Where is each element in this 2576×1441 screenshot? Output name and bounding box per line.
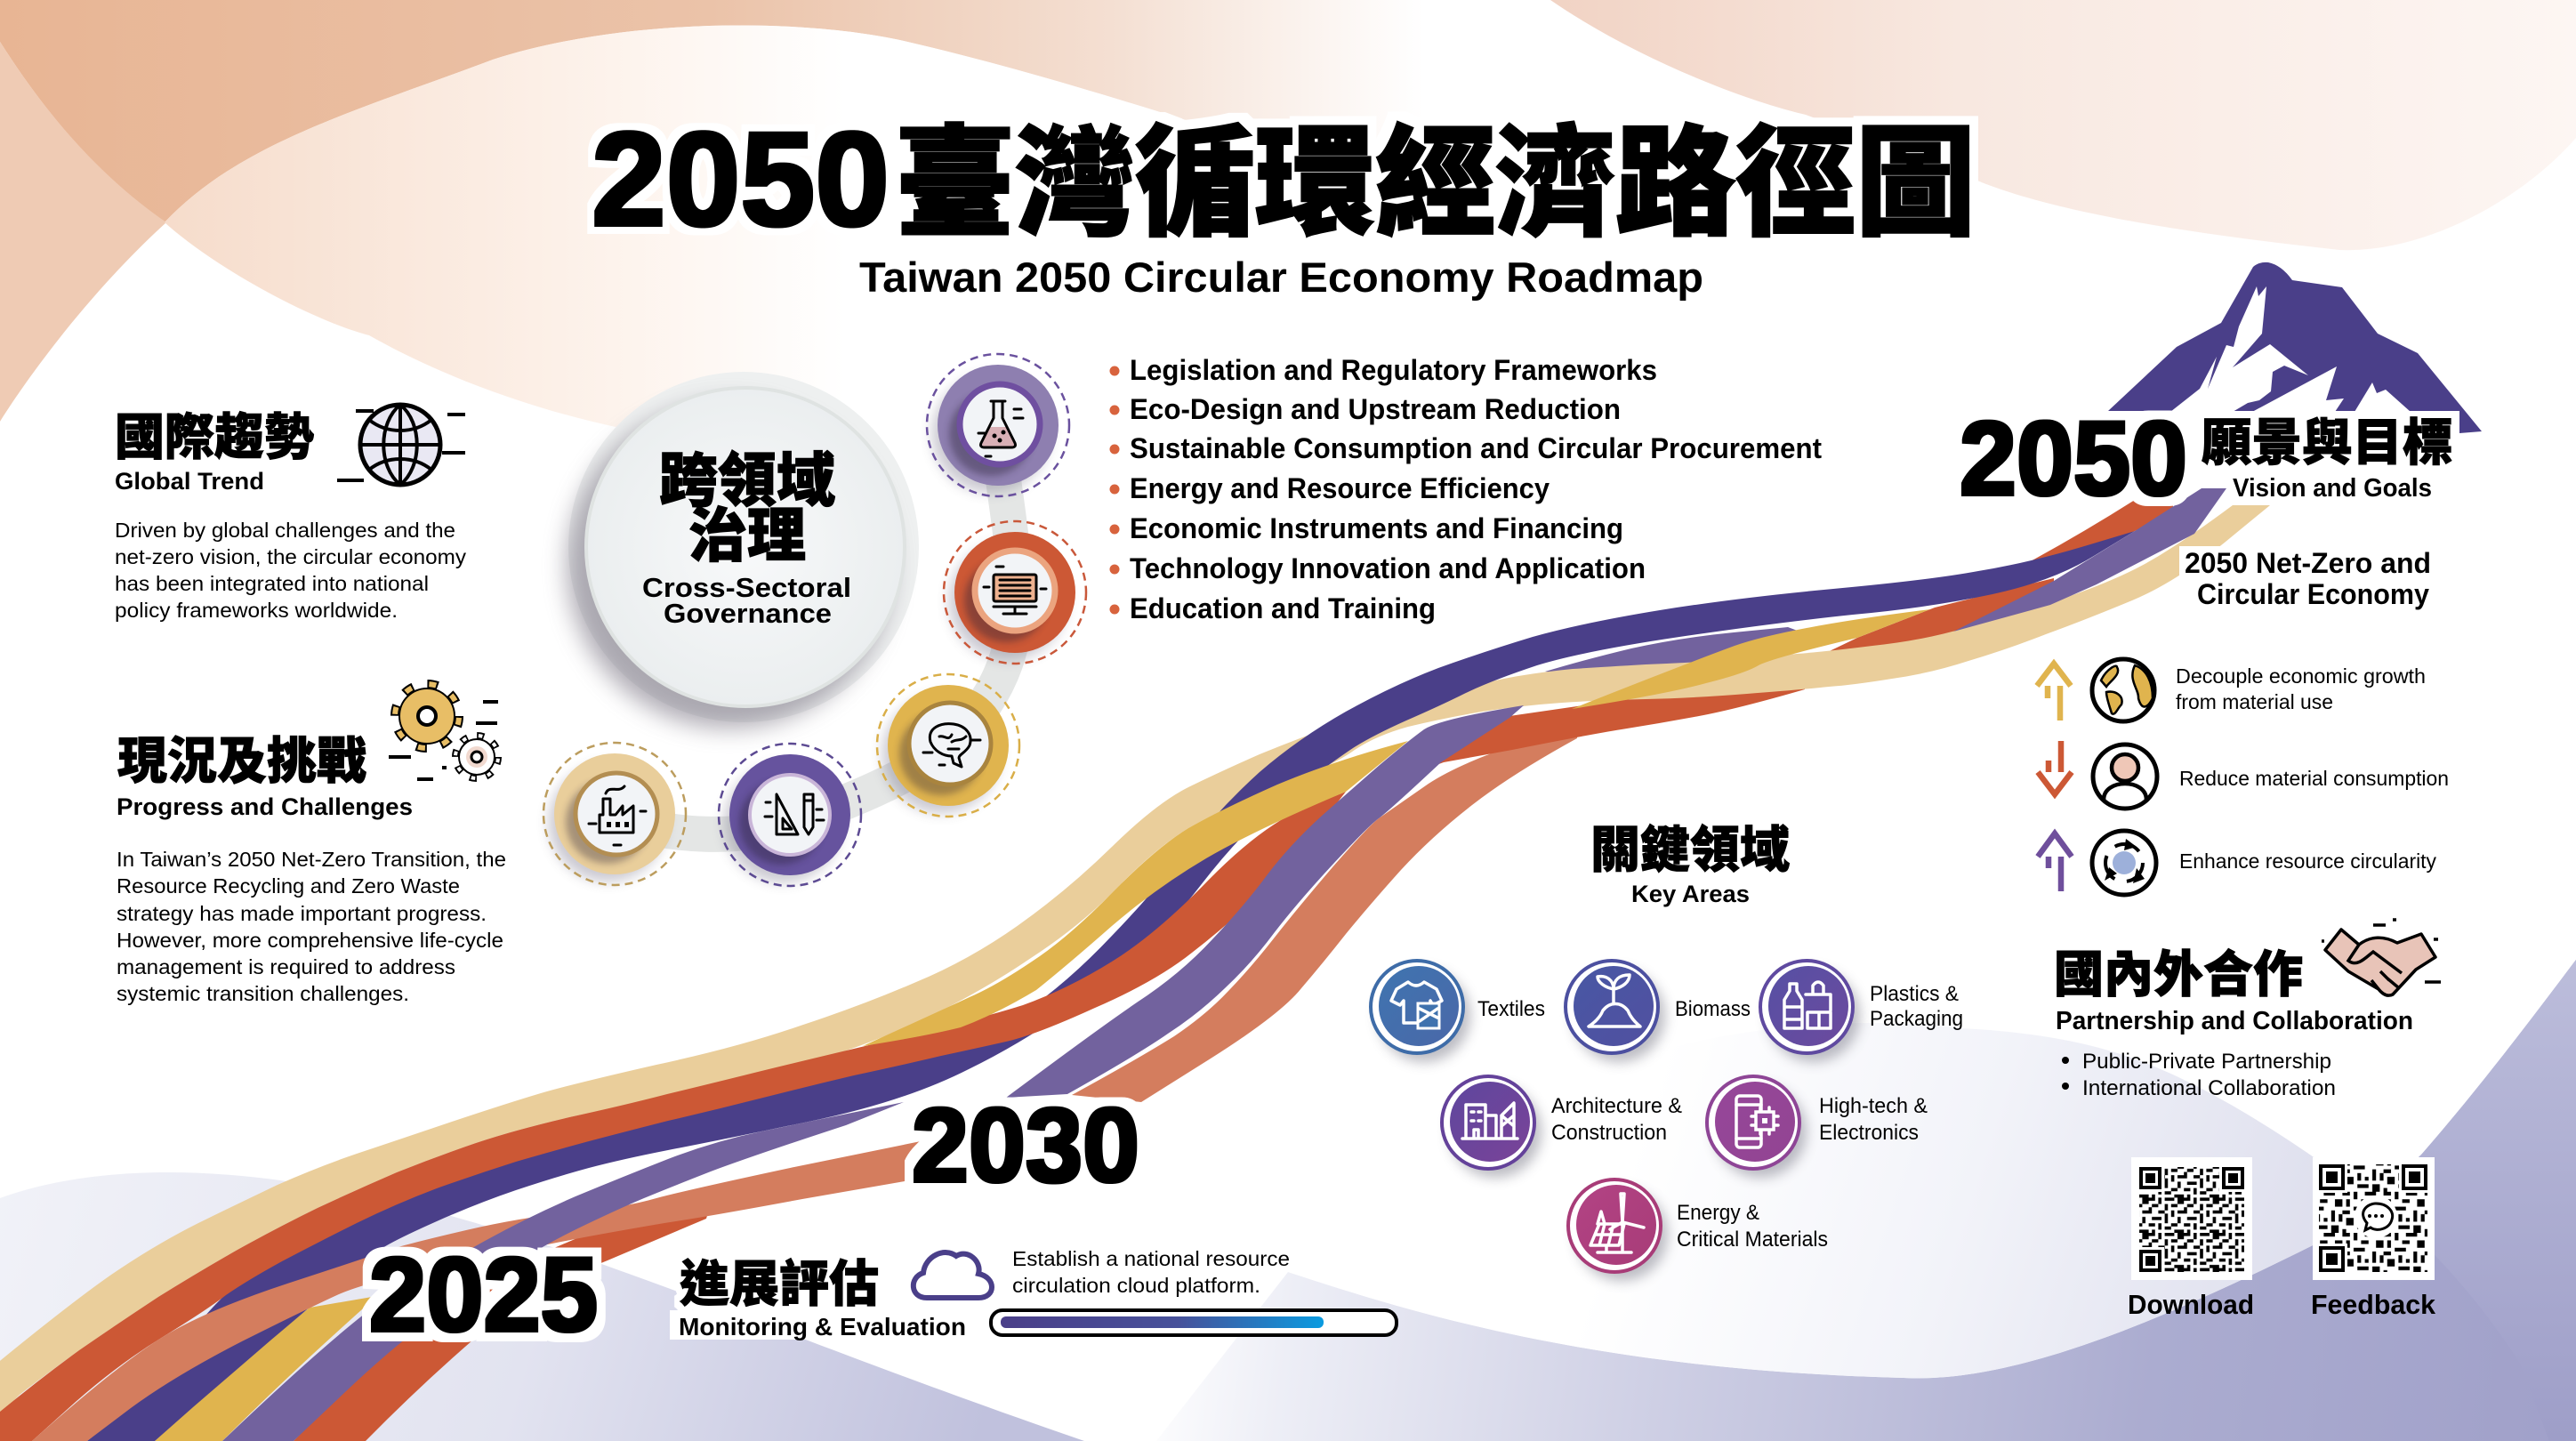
node: monitor: [944, 521, 1086, 664]
year label 2050: 2050: [1960, 400, 2187, 518]
title: year part: 2050: [592, 104, 890, 254]
text: progress description: systemic transition challenges.: [117, 982, 409, 1005]
text: progress description: [117, 848, 506, 1005]
title: [592, 104, 1976, 254]
text: global trend description: [115, 519, 467, 622]
text: cloud platform: Establish a national resource: [1012, 1247, 1290, 1270]
background: light lavender lens: [1288, 1023, 2373, 1378]
list: partnership items: Public-Private Partnership: [2082, 1050, 2331, 1074]
text: net-zero goal: Circular Economy: [2197, 578, 2429, 610]
background: top-right peach wave: [1550, 0, 2576, 250]
panel: partnership and collaboration: [2054, 920, 2441, 1100]
node: ruler and pencil: [719, 744, 861, 886]
list: partnership items: [2062, 1050, 2336, 1100]
icon: gears: [389, 684, 498, 779]
heading: global trend chinese: 國際趨勢: [115, 409, 314, 465]
panel: cross-sectoral governance: [543, 354, 1086, 886]
label: feedback: Feedback: [2311, 1289, 2436, 1320]
text: global trend description: policy frameworks worldwide.: [115, 599, 398, 622]
heading: vision english: Vision and Goals: [2233, 474, 2432, 503]
heading: global trend english: Global Trend: [115, 468, 264, 495]
year label 2030: 2030: [912, 1087, 1139, 1204]
node: factory: [543, 743, 686, 885]
background: right lavender wedge: [2373, 960, 2576, 1441]
connector path: [615, 425, 1015, 834]
main circle heading english: Cross-Sectoral: [642, 572, 851, 603]
heading: progress chinese: 現況及挑戰: [117, 733, 366, 789]
node: brain: [877, 674, 1019, 817]
list: governance strategies: Legislation and Regulatory Frameworks: [1130, 354, 1657, 386]
heading: partnership english: Partnership and Collaboration: [2056, 1007, 2413, 1035]
text: enhance: Enhance resource circularity: [2179, 849, 2436, 873]
callout: white backing for vision english: [2230, 471, 2443, 505]
area: plastics and packaging: Plastics &: [1870, 982, 1959, 1006]
text: decouple: Decouple economic growth: [2176, 664, 2426, 688]
text: progress description: management is required to address: [117, 955, 455, 978]
main circle inner disc: [586, 388, 905, 706]
year label 2025: 2025: [369, 1236, 598, 1354]
panel: progress and challenges: [117, 684, 506, 1005]
arrow: down orange: [2038, 741, 2072, 794]
panel: key areas: [1371, 822, 1963, 1281]
node: flask: [927, 354, 1069, 496]
background: top-left peach wave: [0, 0, 1423, 222]
subtitle: Taiwan 2050 Circular Economy Roadmap: [859, 254, 1703, 301]
area: biomass: Biomass: [1675, 997, 1751, 1021]
heading: monitoring english: Monitoring & Evaluation: [679, 1313, 966, 1340]
main circle heading english: Governance: [664, 598, 832, 629]
text: net-zero goal: 2050 Net-Zero and: [2185, 547, 2431, 579]
area: textiles: Textiles: [1477, 997, 1545, 1021]
illustration: mountain: [2108, 262, 2482, 433]
text: progress description: strategy has made important progress.: [117, 902, 487, 925]
text: decouple: from material use: [2176, 690, 2333, 713]
text: progress description: In Taiwan’s 2050 Net-Zero Transition, the: [117, 848, 506, 871]
title: chinese part: 臺灣循環經濟路徑圖: [895, 117, 1976, 251]
area: architecture and construction: Construction: [1551, 1121, 1667, 1145]
list: governance strategies: Eco-Design and Upstream Reduction: [1130, 393, 1621, 425]
main circle outer ring: [568, 372, 919, 722]
area: high-tech and electronics: [1707, 1076, 1928, 1178]
text: global trend description: Driven by global challenges and the: [115, 519, 455, 542]
text: reduce: Reduce material consumption: [2179, 767, 2449, 790]
progress bar: [991, 1310, 1397, 1335]
list: partnership items: International Collaboration: [2082, 1076, 2336, 1100]
icon: handshake: [2322, 920, 2441, 995]
area: plastics and packaging: Packaging: [1870, 1007, 1963, 1031]
callout: white backing for 2050 vision heading: [2197, 412, 2459, 487]
heading: key areas english: Key Areas: [1631, 881, 1750, 907]
panel: global trend: [115, 405, 467, 622]
background: bottom-right lavender band: [1156, 960, 2576, 1441]
area: textiles: [1371, 961, 1545, 1062]
area: biomass: [1566, 961, 1751, 1062]
list: governance strategies: Education and Training: [1130, 592, 1436, 624]
heading: partnership chinese: 國內外合作: [2054, 946, 2303, 1002]
icon: earth: [2092, 659, 2154, 721]
QR code: download: [2131, 1157, 2252, 1280]
shadow cast by main disc: [567, 403, 892, 729]
text: cloud platform: circulation cloud platform.: [1012, 1274, 1260, 1297]
main circle heading chinese: 跨領域: [659, 447, 835, 513]
text: progress description: Resource Recycling and Zero Waste: [117, 874, 460, 898]
area: energy and critical materials: Energy &: [1677, 1201, 1759, 1225]
area: architecture and construction: [1442, 1076, 1682, 1178]
heading: key areas chinese: 關鍵領域: [1590, 822, 1790, 878]
panel: monitoring and evaluation: [670, 1247, 1397, 1340]
text: global trend description: net-zero vision, the circular economy: [115, 545, 467, 568]
goal: enhance circularity: [2038, 831, 2436, 895]
arrow: up gold: [2037, 664, 2071, 720]
area: high-tech and electronics: High-tech &: [1819, 1094, 1928, 1118]
label: download: Download: [2128, 1289, 2254, 1320]
heading: vision chinese: 願景與目標: [2202, 415, 2453, 471]
goal: reduce consumption: [2038, 741, 2449, 809]
main circle heading chinese: 治理: [688, 503, 806, 568]
list: governance strategies: Sustainable Consumption and Circular Procurement: [1130, 432, 1822, 464]
arrow: up purple: [2038, 833, 2072, 891]
goal: decouple growth: [2037, 659, 2426, 721]
icon: cloud: [914, 1252, 992, 1298]
background: pale peach lens: [165, 26, 1423, 427]
area: plastics and packaging: [1760, 961, 1963, 1062]
background: bottom-left lavender hill: [0, 1172, 1084, 1441]
text: global trend description: has been integrated into national: [115, 572, 429, 595]
roadmap ribbons: [0, 488, 2270, 1441]
callout: white backing for net-zero: [2179, 546, 2442, 614]
area: energy and critical materials: Critical Materials: [1677, 1228, 1828, 1252]
list: governance strategies: Energy and Resource Efficiency: [1130, 472, 1550, 504]
background: left light peach wedge: [0, 40, 166, 424]
icon: globe: [337, 405, 465, 485]
heading: progress english: Progress and Challenges: [117, 793, 413, 820]
QR code: feedback: [2313, 1157, 2435, 1280]
list: governance strategies: Technology Innovation and Application: [1130, 552, 1646, 584]
area: high-tech and electronics: Electronics: [1819, 1121, 1919, 1145]
list: governance strategies: Economic Instruments and Financing: [1130, 512, 1623, 544]
list: governance strategies: [1110, 354, 1822, 624]
text: progress description: However, more comprehensive life-cycle: [117, 929, 503, 952]
area: energy and critical materials: [1568, 1179, 1828, 1281]
icon: person: [2093, 745, 2157, 809]
white backing for english heading: [670, 1310, 970, 1340]
heading: monitoring chinese: 進展評估: [680, 1256, 879, 1312]
area: architecture and construction: Architecture &: [1551, 1094, 1682, 1118]
icon: circular arrows: [2092, 831, 2156, 895]
